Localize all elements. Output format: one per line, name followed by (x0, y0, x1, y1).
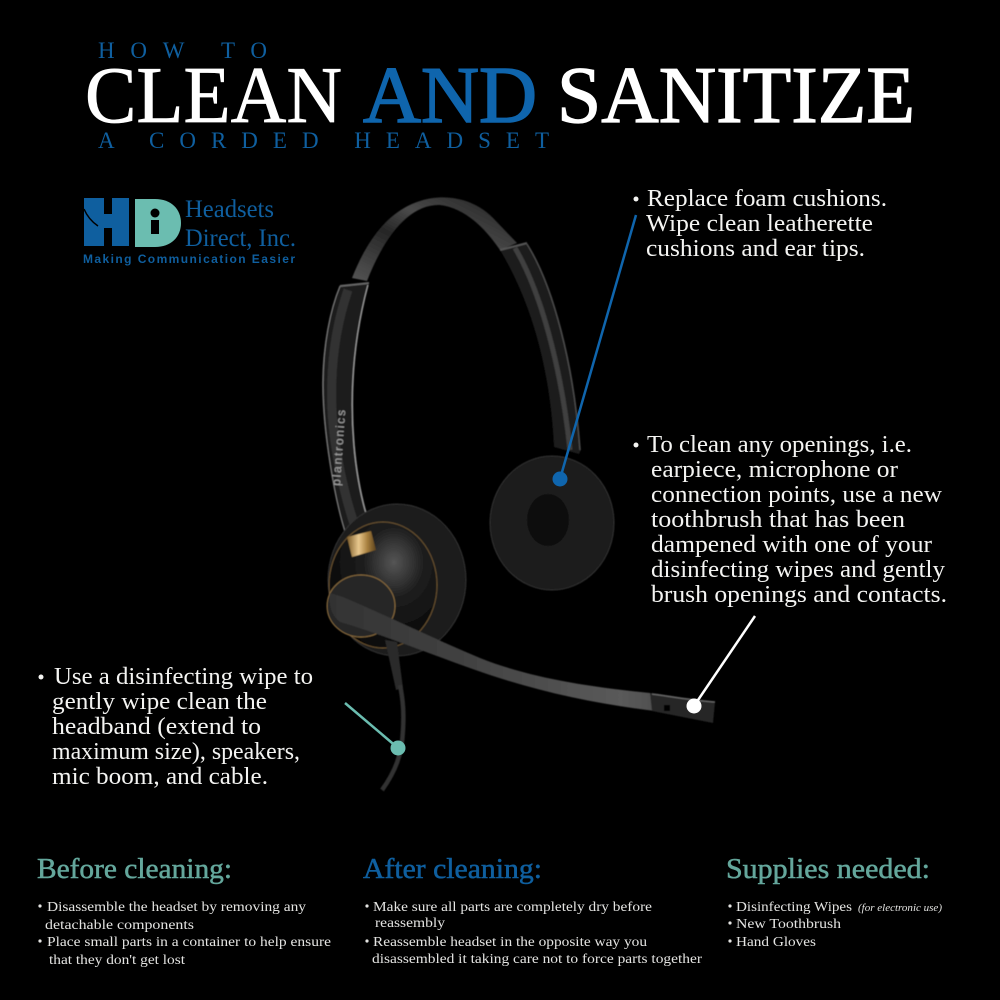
panel: before cleaning: detachable components (45, 918, 194, 933)
logo: Headsets Direct: Direct, Inc. (185, 225, 296, 252)
callout text: disinfecting wipe: headband (extend to (52, 714, 261, 740)
microphone boom (329, 593, 672, 711)
callout text: openings: To clean any openings, i.e. (647, 432, 912, 458)
left slider (322, 283, 373, 538)
gold collar (347, 531, 376, 557)
callout text: openings (634, 432, 947, 608)
logo: Headsets Direct: Headsets (185, 196, 274, 223)
headset illustration (322, 197, 715, 790)
panel: after cleaning: reassembly (375, 916, 445, 931)
panel: supplies needed: New Toothbrush (736, 917, 841, 932)
callout pointer: cable (345, 703, 406, 756)
panel: supplies needed: Supplies needed: (726, 854, 930, 885)
panel: before cleaning: Place small parts in a container to help ensure (47, 935, 331, 950)
callout text: openings: disinfecting wipes and gently (651, 557, 945, 583)
brand label: plantronics (329, 409, 348, 486)
callout text: cushions: Replace foam cushions. (647, 186, 887, 212)
boom tip (650, 693, 715, 723)
title: HOW TO (98, 38, 267, 63)
logo: Headsets Direct: Making Communication Easier (83, 252, 295, 266)
left ear pad and cup (327, 504, 466, 656)
panel: supplies needed (726, 854, 943, 950)
title (85, 38, 915, 153)
panel: before cleaning: Disassemble the headset by removing any (47, 900, 306, 915)
callout text: openings: connection points, use a new (651, 482, 943, 508)
panel: after cleaning: Reassemble headset in the opposite way you (373, 935, 647, 950)
panel: after cleaning: After cleaning: (363, 854, 542, 885)
title: A CORDED HEADSET (98, 128, 549, 153)
callout text: disinfecting wipe: maximum size), speakers, (52, 739, 300, 765)
panel: supplies needed: Disinfecting Wipes (736, 900, 852, 915)
callout text: openings: dampened with one of your (651, 532, 932, 558)
callout text: disinfecting wipe: mic boom, and cable. (52, 764, 268, 790)
title: CLEAN (85, 52, 342, 140)
callout text: openings: toothbrush that has been (651, 507, 905, 533)
callout text: cushions: Wipe clean leatherette (646, 211, 873, 237)
panel: before cleaning: that they don't get lost (49, 953, 185, 968)
panel: before cleaning (37, 854, 331, 968)
panel: after cleaning (363, 854, 702, 967)
right ear pad (490, 456, 614, 590)
callout pointer: microphone (686, 616, 755, 714)
logo: Headsets Direct (83, 196, 296, 266)
headband arc (352, 197, 517, 281)
cable (382, 640, 403, 790)
callout text: disinfecting wipe (38, 664, 313, 790)
title: SANITIZE (557, 52, 915, 140)
callout text: disinfecting wipe: gently wipe clean the (52, 689, 267, 715)
callout text: openings: earpiece, microphone or (651, 457, 898, 483)
callout pointer: ear cushion (552, 215, 636, 486)
right slider (500, 243, 581, 454)
panel: supplies needed: Hand Gloves (736, 935, 816, 950)
panel: before cleaning: Before cleaning: (37, 854, 232, 885)
callout text: cushions (634, 186, 887, 262)
title: AND (363, 52, 537, 140)
callout text: openings: brush openings and contacts. (651, 582, 947, 608)
panel: supplies needed: (for electronic use) (858, 903, 943, 914)
panel: after cleaning: disassembled it taking care not to force parts together (372, 952, 702, 967)
callout text: disinfecting wipe: Use a disinfecting wipe to (54, 664, 313, 690)
panel: after cleaning: Make sure all parts are completely dry before (373, 900, 652, 915)
callout text: cushions: cushions and ear tips. (646, 236, 865, 262)
